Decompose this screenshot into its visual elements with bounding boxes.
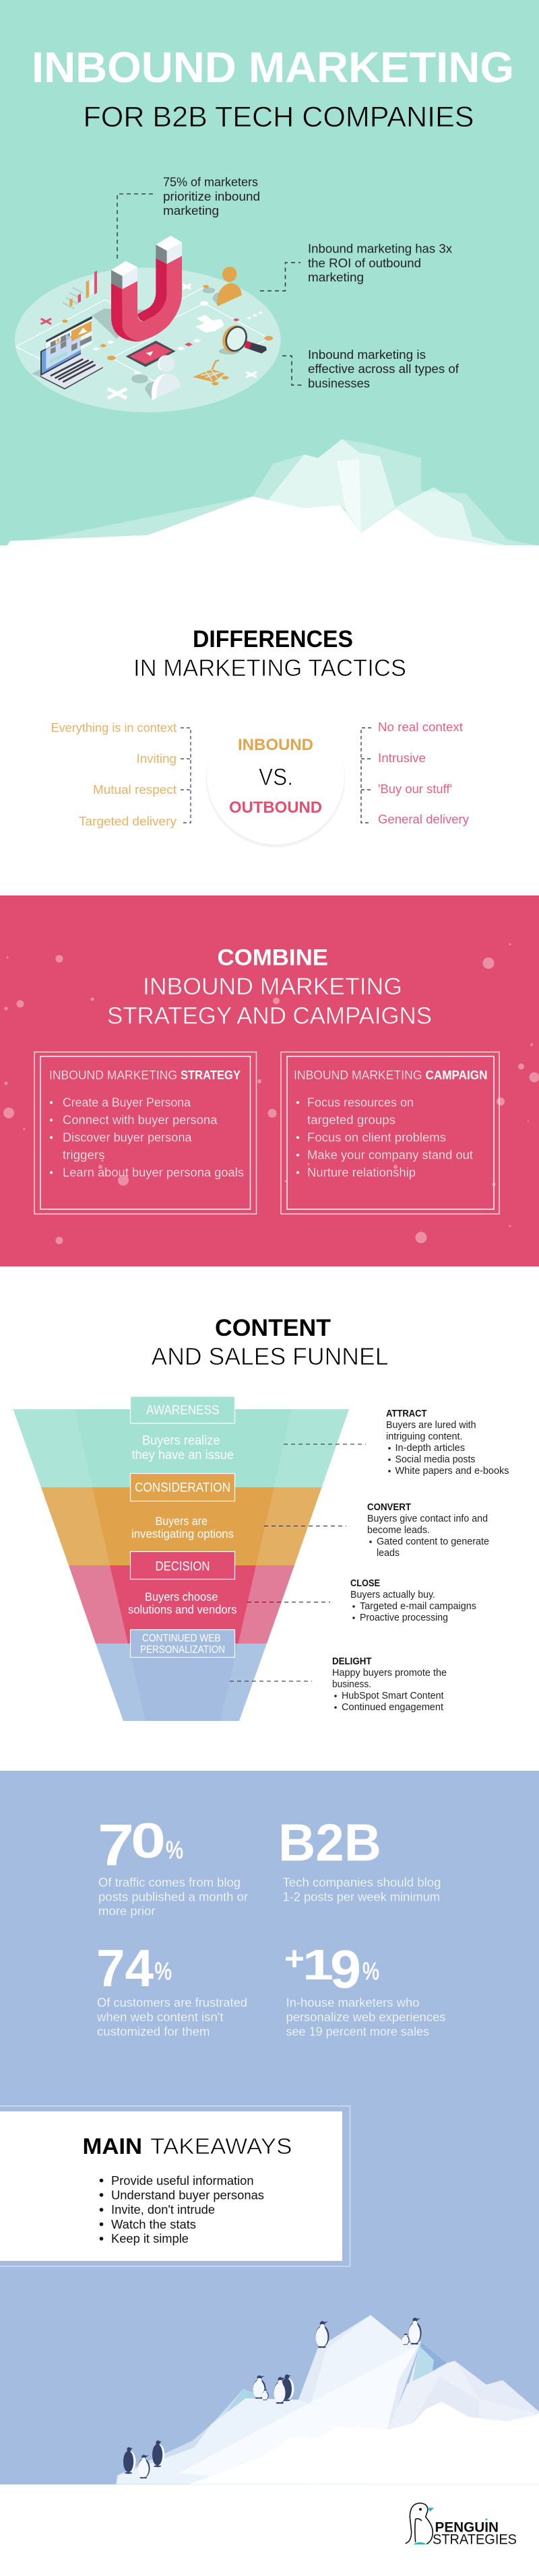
card: inbound marketing campaign	[281, 1052, 499, 1214]
card: main takeaways	[0, 2106, 350, 2266]
funnel tier: continued web personalization	[96, 1629, 267, 1721]
stat: 70% of traffic	[98, 1812, 248, 1918]
list: outbound traits	[361, 720, 469, 826]
stat: +19% more sales: see 19 percent more sales	[286, 2024, 429, 2039]
list: inbound traits: Inviting	[136, 752, 177, 766]
card: main takeaways: Keep it simple	[111, 2231, 189, 2245]
card: inbound marketing strategy	[34, 1052, 256, 1214]
stat: 74% of customers: 74	[96, 1938, 154, 1998]
circle: inbound vs outbound: VS.	[259, 764, 293, 790]
card: inbound marketing campaign: Focus resources on	[307, 1096, 414, 1110]
callout: all types of businesses: businesses	[308, 377, 370, 391]
connector lines	[230, 1444, 366, 1681]
text block: attract: ATTRACT	[386, 1409, 427, 1419]
icon: video tablet	[126, 341, 176, 367]
stat: B2B blogging: B2B	[278, 1812, 381, 1872]
stat: B2B blogging: Tech companies should blog	[283, 1875, 441, 1889]
text block: delight: DELIGHT	[332, 1656, 372, 1667]
stat: +19% more sales: 1	[303, 1940, 334, 1989]
text block: delight	[332, 1656, 447, 1713]
icon: magnet	[111, 236, 182, 341]
illustration: iceberg mountain	[116, 2315, 539, 2484]
card: inbound marketing strategy: STRATEGY	[181, 1068, 241, 1082]
text block: attract: In-depth articles	[395, 1443, 465, 1454]
heading: combine: INBOUND MARKETING	[143, 974, 402, 1000]
heading: content: AND SALES FUNNEL	[151, 1343, 388, 1370]
stat: +19% more sales: +	[284, 1940, 305, 1977]
card: inbound marketing strategy: Learn about buyer persona goals	[63, 1166, 244, 1180]
card: inbound marketing strategy: Create a Buyer Persona	[63, 1096, 191, 1110]
text block: delight: business.	[332, 1679, 371, 1690]
callout: all types of businesses	[282, 348, 459, 391]
panel: content and sales funnel	[13, 1315, 509, 1721]
funnel tier: awareness: Buyers realize	[142, 1434, 220, 1448]
callout: all types of businesses: effective across all types of	[308, 362, 459, 376]
icon: thumbs up	[195, 315, 224, 333]
logo: Penguin Strategies: STRATEGIES	[433, 2532, 517, 2548]
callout: 75% of marketers	[117, 175, 260, 261]
funnel tier: decision: DECISION	[155, 1559, 210, 1574]
card: inbound marketing strategy: triggers	[63, 1149, 105, 1162]
card: inbound marketing strategy: INBOUND MARKETING	[49, 1068, 177, 1082]
text block: delight: Happy buyers promote the	[332, 1668, 447, 1679]
stat: 74% of customers: when web content isn't	[96, 2010, 224, 2024]
heading: differences: DIFFERENCES	[193, 626, 353, 652]
text block: close: Buyers actually buy.	[350, 1590, 435, 1600]
stat: B2B blogging: 1-2 posts per week minimum	[283, 1889, 440, 1904]
stat: 74% of customers: Of customers are frustrated	[97, 1996, 247, 2009]
funnel tier: awareness	[13, 1396, 349, 1487]
card: main takeaways: TAKEAWAYS	[150, 2134, 292, 2159]
funnel tier: consideration	[41, 1473, 322, 1565]
heading: combine: STRATEGY AND CAMPAIGNS	[107, 1003, 432, 1029]
card: inbound marketing campaign: Nurture relationship	[307, 1166, 416, 1180]
stat: 70% of traffic: 7	[98, 1812, 134, 1878]
stat: 70% of traffic: 0	[131, 1814, 166, 1868]
heading: combine: COMBINE	[217, 945, 328, 971]
icon: penguins	[123, 2317, 422, 2478]
icon: person	[217, 265, 242, 306]
heading: differences	[133, 626, 406, 681]
icon: white person	[152, 355, 181, 401]
card: main takeaways: Provide useful information	[111, 2173, 253, 2188]
funnel tier: awareness: they have an issue	[132, 1448, 234, 1462]
funnel tier: decision	[69, 1551, 294, 1643]
connector nodes	[62, 285, 273, 374]
callout: 3x ROI: Inbound marketing has 3x	[308, 242, 452, 256]
text block: close: CLOSE	[350, 1578, 380, 1589]
funnel tier: decision: Buyers choose	[145, 1590, 218, 1604]
funnel tier: continued web personalization: CONTINUED WEB	[142, 1633, 221, 1644]
platform disc	[15, 268, 281, 412]
list: inbound traits: Targeted delivery	[79, 815, 177, 828]
heading: differences: IN MARKETING TACTICS	[133, 655, 406, 681]
stat: 70% of traffic: posts published a month or	[98, 1889, 248, 1904]
card: main takeaways: MAIN	[82, 2134, 142, 2159]
stat: 70% of traffic: more prior	[98, 1904, 155, 1918]
card: inbound marketing campaign: INBOUND MARKETING	[294, 1068, 422, 1082]
funnel tier: consideration: investigating options	[131, 1527, 234, 1540]
stat: 70% of traffic: %	[166, 1836, 183, 1864]
card: main takeaways: Understand buyer personas	[111, 2188, 264, 2202]
heading: combine	[107, 945, 432, 1029]
panel: differences in marketing tactics	[51, 626, 469, 848]
illustration: isometric magnet platform	[15, 236, 281, 412]
text block: attract: Buyers are lured with	[386, 1420, 476, 1431]
card: inbound marketing campaign: Focus on client problems	[307, 1131, 446, 1145]
list: outbound traits: General delivery	[378, 813, 469, 826]
text block: close: Targeted e-mail campaigns	[360, 1601, 476, 1612]
subtitle: for B2B tech companies: FOR B2B TECH COMPANIES	[84, 101, 474, 133]
callout: 3x ROI: the ROI of outbound	[308, 257, 421, 270]
funnel tier: consideration: CONSIDERATION	[135, 1481, 230, 1495]
list: inbound traits: Mutual respect	[93, 783, 177, 796]
stat: 74% of customers: customized for them	[97, 2024, 210, 2039]
heading: content: CONTENT	[215, 1315, 331, 1341]
callout: 75% of marketers: prioritize inbound	[163, 190, 260, 203]
text block: attract: intriguing content.	[386, 1431, 462, 1442]
icon: laptop	[40, 316, 103, 389]
callout: 3x ROI	[260, 242, 452, 291]
list: outbound traits: No real context	[378, 720, 463, 734]
stat: +19% more sales: In-house marketers who	[286, 1996, 419, 2009]
icon: bar chart	[62, 271, 97, 310]
text block: convert: Buyers give contact info and	[367, 1514, 488, 1524]
icon: shopping cart	[193, 360, 228, 385]
card: main takeaways: Invite, don't intrude	[111, 2202, 215, 2216]
text block: attract	[386, 1409, 509, 1477]
callout: 3x ROI: marketing	[308, 271, 364, 284]
text block: convert: become leads.	[367, 1525, 430, 1536]
panel: combine strategy and campaigns	[0, 895, 539, 1266]
list: inbound traits	[51, 721, 191, 828]
callout: all types of businesses: Inbound marketing is	[308, 348, 426, 362]
callout: 75% of marketers: marketing	[163, 204, 219, 217]
title: Inbound Marketing: INBOUND MARKETING	[32, 43, 514, 92]
funnel tier: awareness: AWARENESS	[146, 1403, 220, 1418]
text block: attract: White papers and e-books	[395, 1466, 509, 1477]
card: inbound marketing campaign: Make your company stand out	[307, 1149, 473, 1162]
text block: attract: Social media posts	[395, 1454, 476, 1465]
circle: inbound vs outbound: OUTBOUND	[229, 799, 322, 817]
panel: statistics	[0, 1771, 539, 2484]
text block: convert: leads	[377, 1548, 400, 1559]
stat: 70% of traffic: Of traffic comes from blog	[98, 1875, 241, 1889]
stat: 74% of customers: %	[155, 1957, 172, 1985]
heading: content	[151, 1315, 388, 1370]
card: main takeaways: Watch the stats	[111, 2217, 196, 2231]
stat: +19% more sales: %	[362, 1957, 379, 1985]
text block: convert: Gated content to generate	[377, 1536, 489, 1547]
text block: delight: Continued engagement	[342, 1702, 443, 1713]
logo: Penguin Strategies	[406, 2503, 517, 2548]
text block: close: Proactive processing	[360, 1613, 448, 1623]
illustration: snowy mountains	[7, 439, 539, 545]
text block: close	[350, 1578, 476, 1623]
panel: hero header	[0, 0, 539, 545]
list: outbound traits: Intrusive	[378, 751, 426, 765]
funnel tier: consideration: Buyers are	[155, 1514, 208, 1528]
logo: Penguin Strategies: PENGUIN	[435, 2519, 499, 2536]
list: inbound traits: Everything is in context	[51, 721, 177, 735]
circle: inbound vs outbound: INBOUND	[238, 736, 313, 754]
icon: magnifying glass	[218, 322, 267, 356]
text block: delight: HubSpot Smart Content	[342, 1691, 443, 1701]
stat: +19% more sales: 9	[330, 1939, 361, 1999]
chart: funnel	[13, 1396, 349, 1721]
funnel tier: decision: solutions and vendors	[128, 1602, 237, 1616]
list: outbound traits: 'Buy our stuff'	[378, 782, 452, 796]
text block: convert	[367, 1502, 489, 1559]
card: inbound marketing strategy: Discover buyer persona	[63, 1131, 192, 1145]
text block: convert: CONVERT	[367, 1502, 411, 1513]
stat: +19% more sales: personalize web experiences	[286, 2010, 446, 2024]
circle: inbound vs outbound	[206, 707, 345, 848]
stat: +19% more sales	[284, 1939, 446, 2039]
card: inbound marketing strategy: Connect with buyer persona	[63, 1114, 218, 1127]
callout: 75% of marketers: 75% of marketers	[163, 175, 258, 189]
stat: B2B blogging	[278, 1812, 441, 1904]
funnel tier: continued web personalization: PERSONALIZATION	[140, 1644, 225, 1656]
icon: crosses	[41, 284, 257, 398]
card: inbound marketing campaign: targeted groups	[307, 1114, 395, 1127]
card: inbound marketing campaign: CAMPAIGN	[426, 1068, 488, 1082]
stat: 74% of customers	[96, 1938, 247, 2039]
